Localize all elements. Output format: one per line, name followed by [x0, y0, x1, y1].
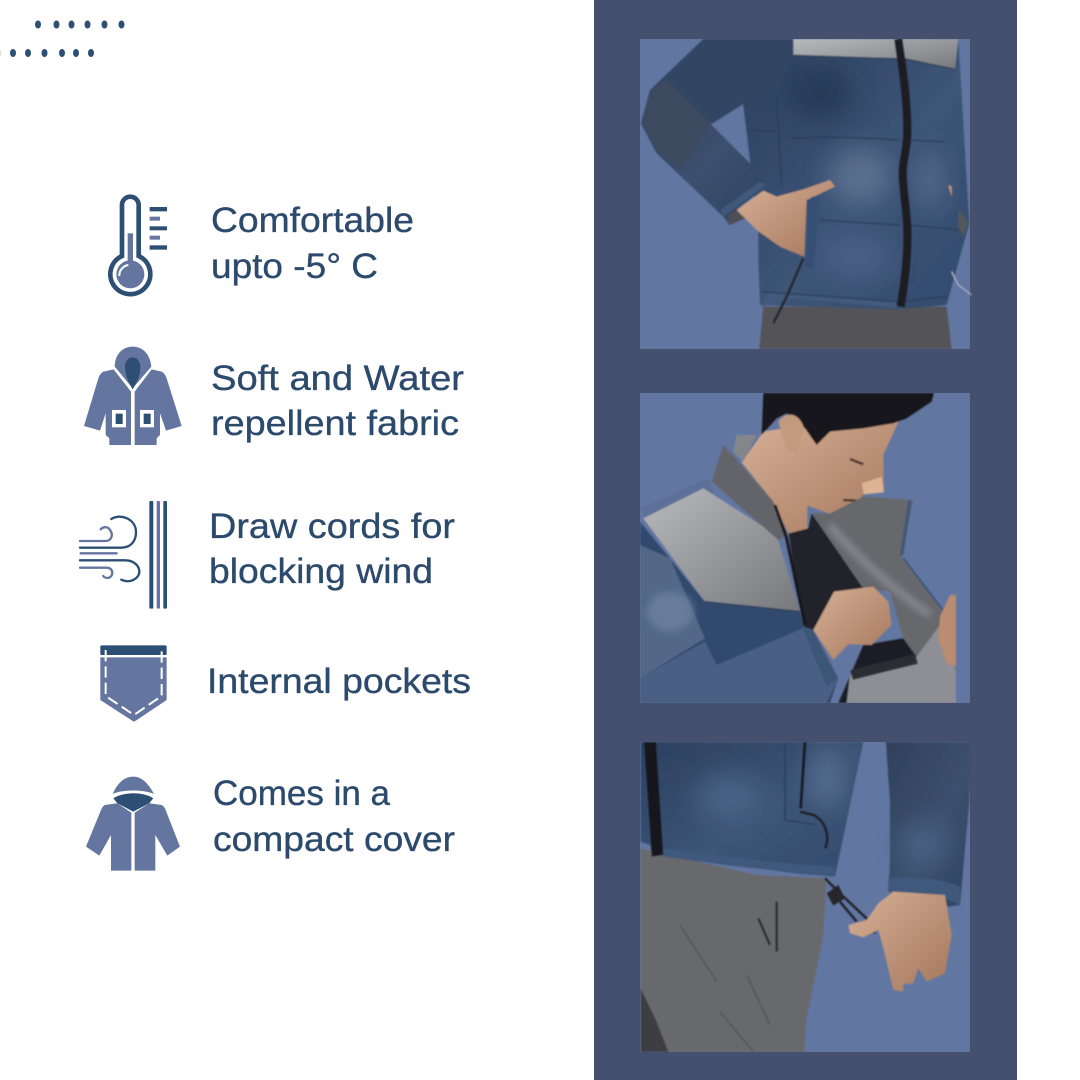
text: draw cords: Draw cords for — [209, 507, 455, 546]
icon: wind and barrier — [80, 501, 167, 609]
text: comfortable: Comfortable — [211, 201, 414, 240]
text: comfortable — [211, 201, 414, 286]
icon: compact cover jacket — [86, 777, 180, 871]
photo: hand in jacket pocket — [640, 39, 972, 349]
photo: man opening jacket to inner pocket — [640, 393, 970, 703]
text: soft and water: Soft and Water — [211, 359, 464, 398]
text: compact cover: compact cover — [213, 820, 455, 859]
icon: hooded jacket with pockets — [84, 347, 182, 445]
icon: thermometer — [110, 197, 167, 294]
text: draw cords: blocking wind — [209, 552, 433, 591]
text: compact cover — [213, 774, 455, 859]
text: soft and water: repellent fabric — [211, 404, 459, 443]
text: draw cords — [209, 507, 455, 591]
text: internal pockets: Internal pockets — [207, 662, 471, 701]
text: comfortable: upto -5° C — [211, 247, 378, 286]
text: compact cover: Comes in a — [213, 774, 391, 813]
panel: photo column — [594, 0, 1017, 1080]
decorative dots — [0, 20, 124, 57]
icon: pocket — [100, 645, 167, 721]
photo: hand pulling draw cord — [640, 742, 972, 1052]
text: soft and water — [211, 359, 464, 443]
